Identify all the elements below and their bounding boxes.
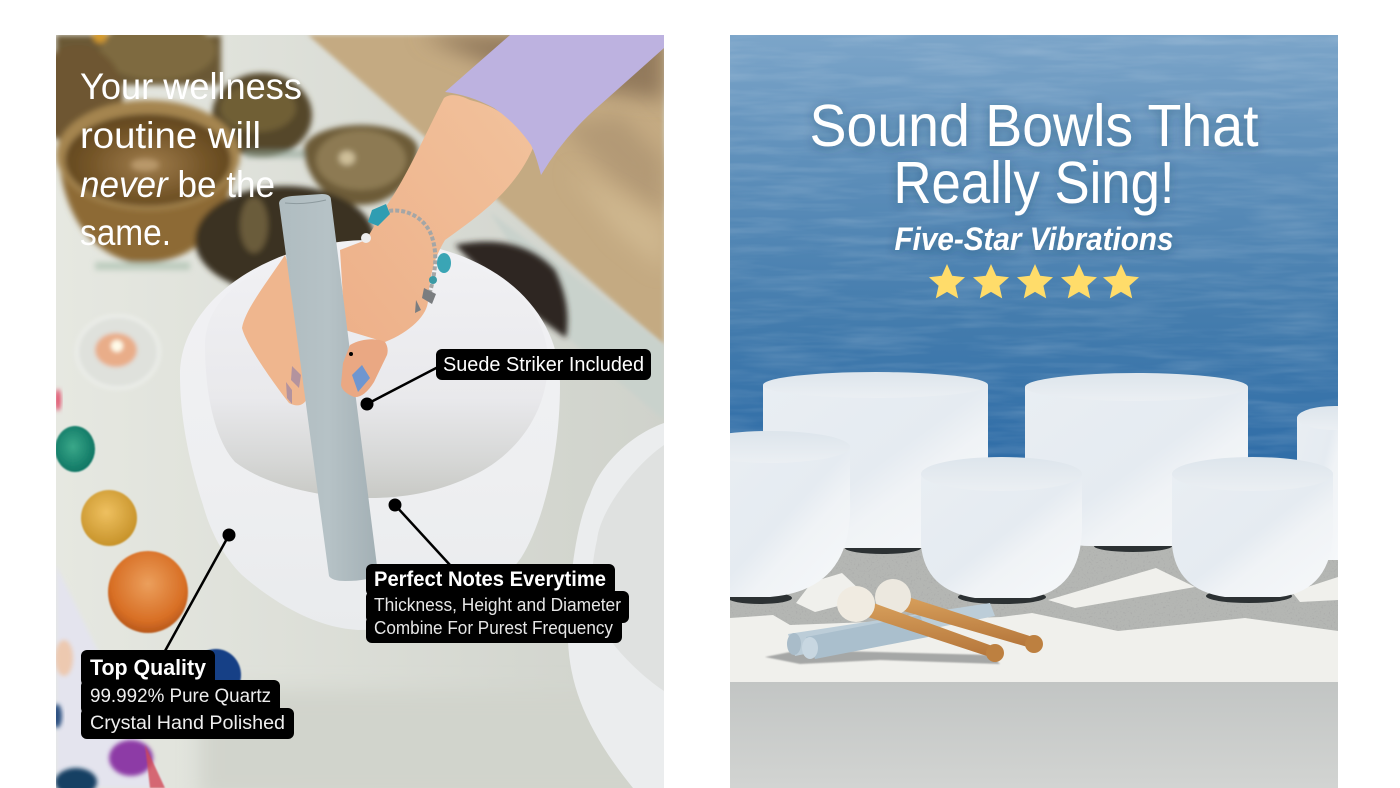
arm and hand xyxy=(242,95,533,405)
callout: top quality: Crystal Hand Polished xyxy=(90,713,285,734)
callout: suede striker: Suede Striker Included xyxy=(443,354,644,376)
panel: right photo, bowls on ledge by the sea xyxy=(730,35,1338,788)
heading: your wellness routine: Your wellness xyxy=(80,66,302,107)
callout: top quality: Top Quality xyxy=(90,655,207,680)
suede striker xyxy=(279,194,378,581)
crystal bowl: front right xyxy=(1172,457,1333,597)
lavender sleeve xyxy=(445,35,664,175)
heading: your wellness routine: never be the xyxy=(80,164,275,205)
mallet shadows xyxy=(765,650,1000,664)
right crystal bowl xyxy=(568,423,664,788)
sunlit ledge patches xyxy=(730,568,1338,683)
left colourful strip xyxy=(57,574,150,788)
callout: perfect notes xyxy=(366,498,629,643)
crystal bowl: back left xyxy=(763,372,988,548)
bracelet xyxy=(361,204,451,313)
callout: perfect notes: Thickness, Height and Diameter xyxy=(374,595,621,615)
callout: top quality: 99.992% Pure Quartz xyxy=(90,686,271,707)
suede strikers on ledge xyxy=(787,603,995,659)
heading: sound bowls that really sing xyxy=(810,93,1258,216)
large crystal bowl xyxy=(180,240,560,630)
lower table tone xyxy=(200,693,413,788)
crystal bowl: back middle xyxy=(1025,373,1248,546)
brass bowls top left xyxy=(33,20,568,338)
heading: your wellness routine: same. xyxy=(80,212,171,253)
crystal bowl: back right xyxy=(1297,406,1338,560)
candle in glass xyxy=(92,330,140,370)
bowl bases xyxy=(728,540,1292,604)
sea background xyxy=(730,35,1338,460)
callout: perfect notes: Combine For Purest Frequency xyxy=(374,618,613,638)
ledge front face xyxy=(730,682,1338,788)
heading: your wellness routine: routine will xyxy=(80,115,261,156)
heading: sound bowls that really sing: Really Sing! xyxy=(894,150,1174,216)
sea ripple texture xyxy=(730,35,1338,465)
crystal bowl: front left xyxy=(730,431,850,597)
gem spheres xyxy=(52,389,241,788)
heading: your wellness routine xyxy=(80,66,302,253)
thumb xyxy=(341,339,388,397)
icon: five gold stars xyxy=(929,264,1139,298)
small dot on thumb xyxy=(349,352,353,356)
heading: sound bowls that really sing: Sound Bowls That xyxy=(810,93,1258,159)
concrete speckle xyxy=(731,548,1338,630)
panel: left photo, hand striking crystal bowl xyxy=(33,20,680,788)
callout: suede striker xyxy=(360,349,651,410)
subheading: five-star vibrations: Five-Star Vibrations xyxy=(894,221,1174,257)
crystal bowl: front middle xyxy=(921,457,1082,598)
concrete ledge top in shade xyxy=(730,546,1338,631)
callout: perfect notes: Perfect Notes Everytime xyxy=(374,568,606,591)
pale table corner xyxy=(498,220,663,349)
mallets xyxy=(837,579,1043,662)
callout: top quality xyxy=(81,528,294,739)
cardboard tubes background xyxy=(308,35,664,345)
table surface background xyxy=(56,35,664,788)
